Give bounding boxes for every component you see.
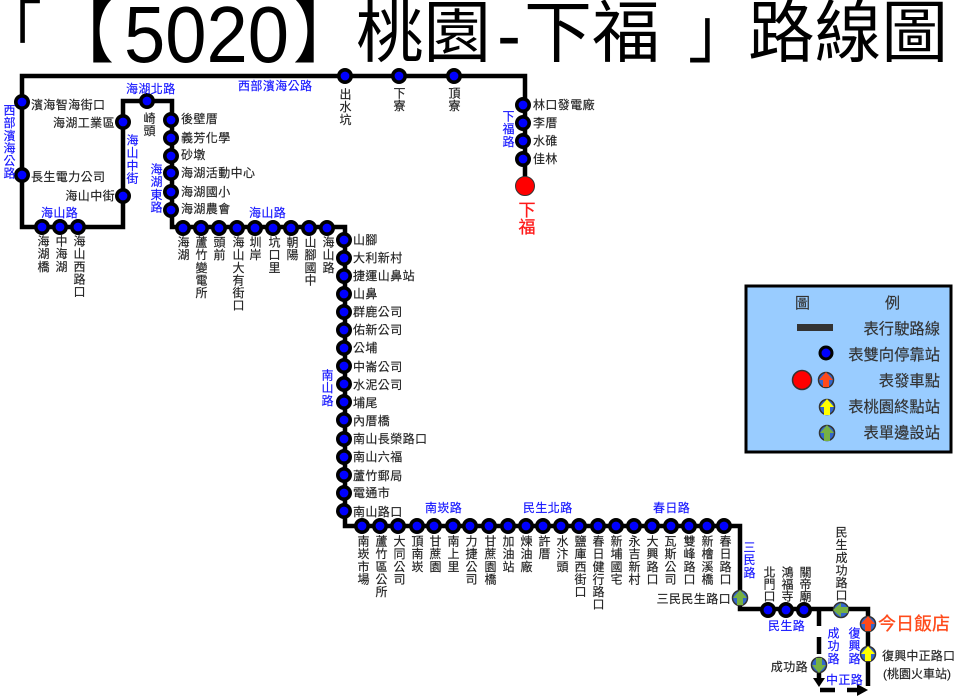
road names: 復興路	[847, 627, 861, 665]
stop: Chenggong Rd (one-way)	[812, 658, 826, 673]
stop labels: 南山路口	[353, 504, 403, 519]
stop labels: 南山六福	[353, 449, 403, 464]
stop labels: 中海湖	[54, 234, 68, 273]
branch route: Chenggong Rd dashed	[813, 609, 868, 696]
road names: 南崁路	[425, 500, 462, 515]
legend: Taoyuan terminal: 表桃園終點站	[848, 399, 940, 416]
terminal: Fuxing Zhongzheng Rd	[860, 646, 876, 662]
road names: 海湖東路	[149, 162, 163, 213]
road names: 海湖北路	[126, 81, 176, 96]
stop labels: 群鹿公司	[353, 304, 403, 319]
stop labels: 海湖工業區	[53, 115, 115, 130]
stop labels: 頂南崁	[410, 535, 424, 573]
stop labels: 加油站	[501, 535, 515, 573]
legend: one-way stop	[820, 425, 940, 442]
legend panel: 例	[885, 295, 900, 312]
stop labels: 水泥公司	[353, 378, 403, 392]
stop labels: 公埔	[353, 341, 378, 355]
stop labels: 海山路	[321, 235, 335, 274]
road names: 西部濱海公路	[238, 78, 312, 93]
departure point: Jinri Hotel	[860, 616, 876, 632]
terminal name: Xiafu: 下福	[516, 201, 535, 235]
stop labels: 義芳化學	[181, 130, 231, 145]
stop labels: 煉油廠	[519, 535, 533, 573]
legend panel: 圖	[795, 295, 810, 312]
stop labels: 山腳	[353, 233, 378, 247]
road names: 中正路	[826, 672, 863, 687]
stop labels: 水碓	[533, 133, 558, 148]
stop labels: 佑新公司	[353, 322, 403, 337]
stop labels: 海湖橋	[36, 234, 50, 273]
stop labels: 頭前	[212, 236, 226, 261]
stop labels: 大同公司	[392, 535, 406, 585]
stop labels: 海湖	[176, 235, 190, 261]
stop labels: 許厝	[537, 535, 551, 560]
stop labels: 雙峰路口	[682, 535, 696, 585]
stop labels: 長生電力公司	[31, 170, 105, 184]
stop: Minsheng Chenggong Rd (one-way)	[833, 602, 848, 618]
road names: 南山路	[320, 368, 334, 407]
stop labels: 海山大有街口	[231, 235, 245, 312]
stop labels: 崎頭	[142, 112, 156, 137]
departure name: Jinri Hotel: 今日飯店	[878, 614, 950, 634]
stop labels: 海山西路口	[72, 234, 86, 298]
stop labels: 海山中街	[65, 188, 115, 203]
stop labels: 下寮	[392, 87, 406, 112]
stop labels: 海湖農會	[181, 201, 231, 216]
legend: route line	[797, 321, 940, 338]
stop labels: 蘆竹區公所	[374, 535, 388, 598]
stop labels: 南山長榮路口	[353, 431, 427, 446]
stop labels: 新埔國宅	[609, 534, 623, 585]
stop labels: 蘆竹變電所	[194, 236, 208, 299]
legend: one-way stop: 表單邊設站	[864, 425, 940, 442]
stop labels: 頂寮	[447, 87, 461, 112]
stop labels: 中崙公司	[353, 359, 403, 374]
road names	[2, 78, 863, 687]
road names: 成功路	[826, 627, 840, 665]
road names: 海山路	[249, 205, 286, 220]
stop labels: 圳岸	[248, 236, 262, 261]
stop labels: 甘蔗園	[428, 535, 442, 573]
terminal: Xiafu	[516, 176, 534, 196]
stop labels: 大利新村	[353, 250, 403, 265]
road names: 海山中街	[125, 133, 139, 184]
road names: 西部濱海公路	[2, 104, 16, 180]
stop labels: 水汴頭	[555, 535, 569, 573]
stop labels: 三民民生路口	[657, 591, 731, 606]
road names: 三民路	[742, 541, 756, 579]
title	[0, 0, 948, 79]
route line	[22, 76, 868, 686]
stop labels: 埔尾	[353, 396, 378, 410]
stop labels: 新檜溪橋	[700, 534, 714, 585]
stop labels: 海湖活動中心	[181, 165, 255, 180]
stop: Sanmin Minsheng Rd (one-way)	[732, 590, 748, 606]
stop labels: 佳林	[533, 152, 558, 166]
stop labels: 濱海智海街口	[31, 97, 105, 112]
stop labels: 春日路口	[718, 535, 732, 585]
road names: 海山路	[41, 205, 78, 220]
stop labels: 民生成功路口	[834, 526, 848, 602]
stop labels: (桃園火車站)	[883, 666, 951, 681]
stop labels: 砂墩	[181, 148, 206, 162]
road names: 春日路	[653, 500, 690, 515]
stop labels: 復興中正路口	[882, 648, 955, 663]
stop labels: 春日健行路口	[591, 535, 605, 611]
stop labels: 鴻福寺	[780, 566, 794, 602]
stop labels: 北門口	[762, 566, 776, 602]
stop labels: 捷運山鼻站	[353, 268, 415, 283]
stop labels: 南上里	[446, 534, 460, 573]
stop labels: 坑口里	[267, 235, 281, 274]
road names: 民生路	[768, 618, 805, 633]
stop labels: 林口發電廠	[533, 97, 595, 112]
stop labels: 永吉新村	[627, 535, 641, 585]
stop labels: 出水坑	[338, 88, 352, 126]
stop labels: 海湖國小	[181, 184, 231, 199]
stop labels: 成功路	[771, 659, 808, 674]
stop labels: 山鼻	[353, 286, 378, 301]
stop labels: 南崁市場	[356, 534, 370, 585]
stop labels: 李厝	[533, 116, 558, 130]
legend: two-way stop: 表雙向停靠站	[848, 347, 940, 364]
stop labels: 內厝橋	[353, 414, 390, 428]
stop labels: 鹽庫西街口	[573, 534, 587, 598]
stop labels: 大興路口	[645, 535, 659, 585]
legend: route line: 表行駛路線	[864, 321, 940, 338]
road names: 下福路	[501, 110, 515, 148]
road names: 民生北路	[523, 500, 573, 515]
bus stops	[16, 70, 810, 616]
stop labels: 力捷公司	[464, 535, 478, 585]
stop labels: 山腳國中	[303, 236, 317, 286]
stop labels: 後壁厝	[181, 111, 218, 126]
legend: departure point	[792, 370, 940, 390]
stop labels: 甘蔗園橋	[483, 535, 497, 585]
legend: departure point: 表發車點	[879, 373, 940, 390]
stop labels: 蘆竹郵局	[353, 469, 403, 483]
stop labels: 關帝廟	[798, 566, 812, 603]
stop labels: 朝陽	[285, 236, 299, 261]
legend panel	[746, 286, 951, 452]
stop labels: 電通市	[353, 485, 390, 500]
stop labels: 瓦斯公司	[663, 535, 677, 585]
